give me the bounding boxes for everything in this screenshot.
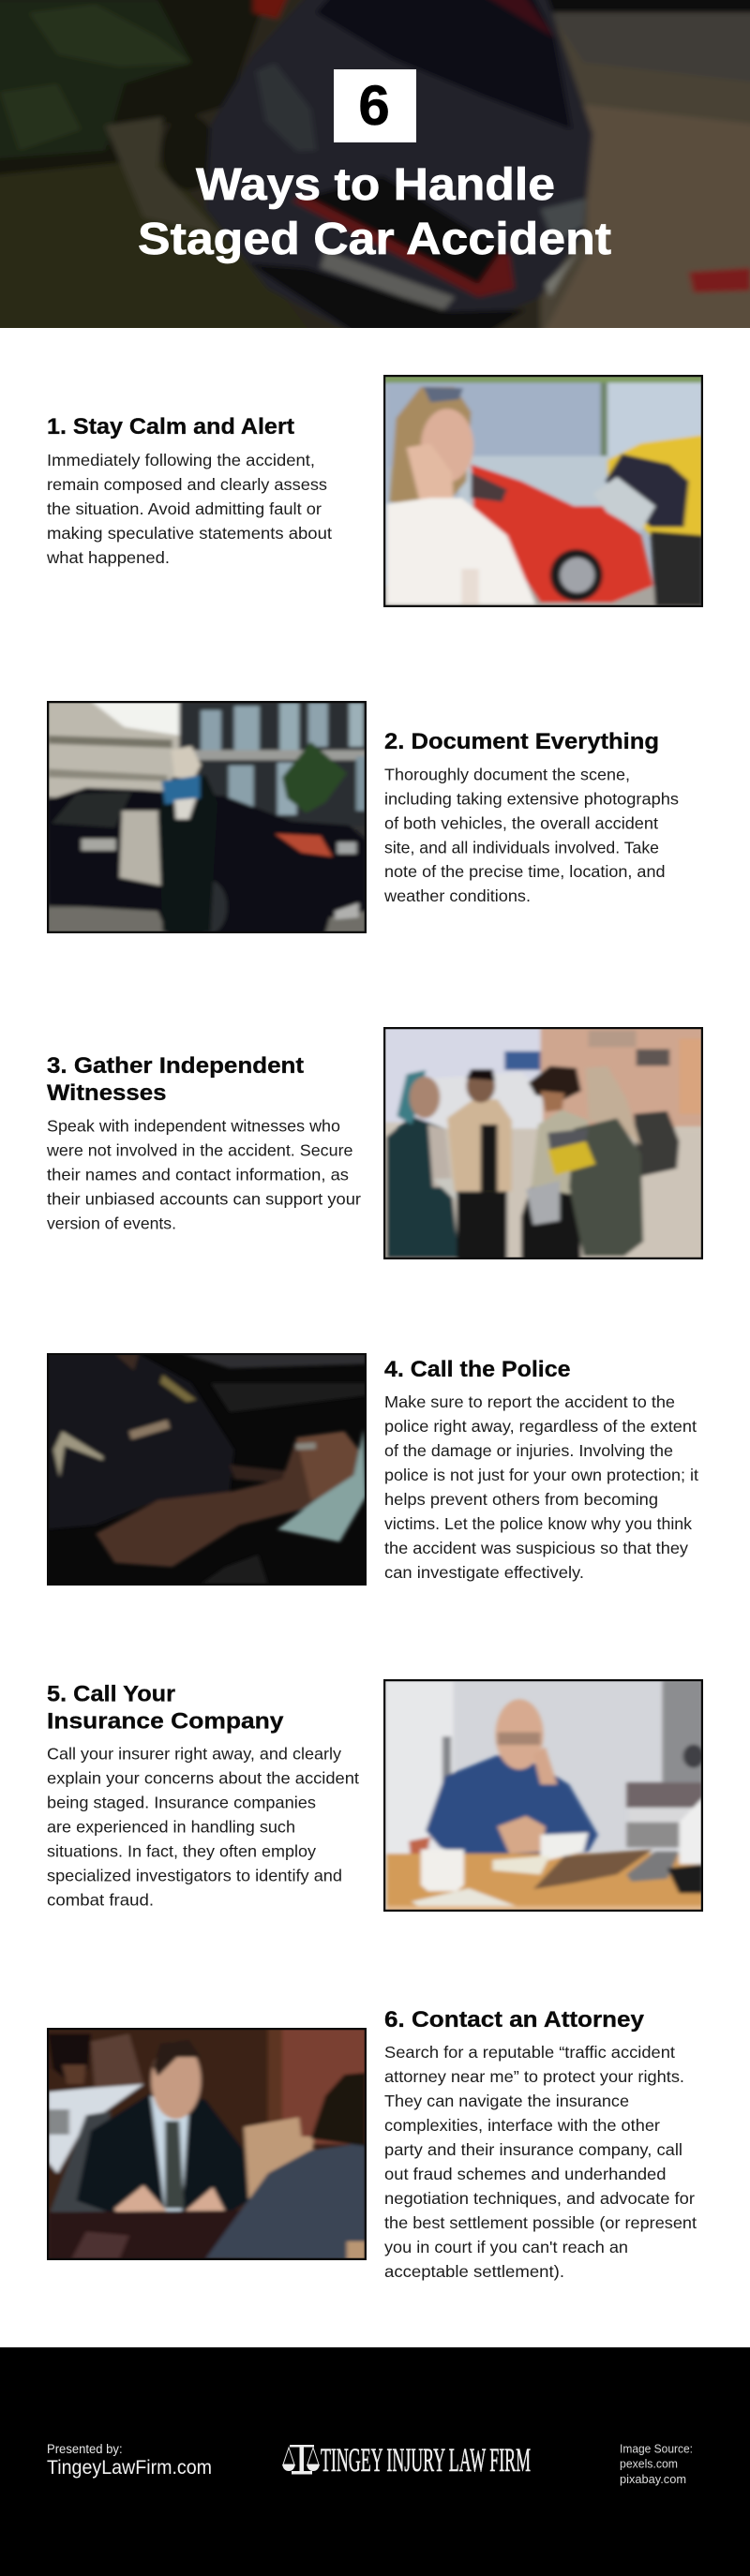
- heading: step 3: [47, 1053, 304, 1106]
- text: step 6: acceptable settlement).: [384, 2262, 564, 2281]
- panel: step 6: [47, 2007, 697, 2281]
- text: step 1: making speculative statements about: [47, 524, 332, 543]
- text: step 5: being staged. Insurance companies: [47, 1794, 316, 1812]
- text: step 4: victims. Let the police know why you think: [384, 1514, 692, 1533]
- text: step 3: were not involved in the accident. Secure: [46, 1141, 352, 1160]
- text: step 4: helps prevent others from becoming: [384, 1490, 658, 1509]
- footer: TINGEY INJURY LAW FIRM: [321, 2441, 531, 2479]
- text: step 6: you in court if you can't reach an: [384, 2238, 628, 2256]
- text: step 1: what happened.: [46, 548, 170, 567]
- text: step 4: police is not just for your own protection; it: [384, 1466, 698, 1484]
- text: step 6: party and their insurance company, call: [384, 2140, 682, 2159]
- number badge: 6: [358, 74, 390, 137]
- text: step 4: police right away, regardless of the extent: [384, 1417, 697, 1436]
- text: step 5: are experienced in handling such: [47, 1818, 295, 1837]
- text: step 6: attorney near me” to protect your rights.: [384, 2067, 684, 2086]
- text: step 4: Make sure to report the accident to the: [384, 1392, 675, 1411]
- heading: step 5: Insurance Company: [47, 1709, 284, 1735]
- title: Staged Car Accident: [138, 215, 611, 264]
- text: step 5: explain your concerns about the accident: [47, 1769, 359, 1788]
- text: step 6: They can navigate the insurance: [384, 2092, 629, 2110]
- text: step 3: their names and contact information, as: [47, 1166, 349, 1184]
- image sources: pexels.com: [620, 2457, 678, 2470]
- heading: step 1: 1. Stay Calm and Alert: [47, 414, 294, 439]
- number badge: [334, 69, 416, 142]
- text: step 6: Search for a reputable “traffic accident: [384, 2043, 675, 2062]
- text: step 5: combat fraud.: [47, 1890, 154, 1909]
- title: [138, 160, 611, 264]
- text: step 3: their unbiased accounts can support your: [47, 1190, 361, 1209]
- text: step 5: [47, 1745, 359, 1909]
- text: step 3: Speak with independent witnesses who: [47, 1117, 340, 1136]
- text: step 1: the situation. Avoid admitting fault or: [47, 499, 322, 518]
- photo: attorney meeting with client: [47, 2028, 368, 2260]
- panel: step 2: [47, 701, 679, 934]
- heading: step 3: 3. Gather Independent: [47, 1053, 304, 1079]
- text: step 2: site, and all individuals involved. Take: [384, 838, 659, 856]
- heading: step 4: 4. Call the Police: [384, 1357, 570, 1382]
- text: step 5: specialized investigators to identify and: [47, 1867, 342, 1885]
- text: step 2: [383, 766, 679, 905]
- text: step 2: weather conditions.: [383, 886, 531, 905]
- footer: [0, 2347, 750, 2576]
- text: step 2: including taking extensive photographs: [384, 789, 679, 808]
- heading: step 5: [47, 1682, 284, 1735]
- image sources: [620, 2441, 693, 2486]
- heading: step 3: Witnesses: [47, 1080, 167, 1106]
- panel: step 3: [46, 1026, 703, 1260]
- text: step 3: [46, 1117, 361, 1232]
- text: step 2: of both vehicles, the overall accident: [384, 813, 658, 832]
- photo: man on phone at desk: [383, 1679, 704, 1913]
- icon: scales of justice: [282, 2445, 320, 2474]
- text: step 6: the best settlement possible (or represent: [384, 2213, 697, 2232]
- presented by: [47, 2442, 212, 2479]
- text: step 1: remain composed and clearly assess: [47, 475, 327, 494]
- presented by: Presented by:: [47, 2442, 123, 2456]
- text: step 2: Thoroughly document the scene,: [384, 766, 630, 784]
- presented by: TingeyLawFirm.com: [47, 2457, 212, 2479]
- title: Ways to Handle: [196, 160, 555, 210]
- text: step 6: negotiation techniques, and advocate for: [384, 2189, 695, 2208]
- photo: group of witnesses on a street: [383, 1026, 703, 1260]
- photo: woman on phone by crashed cars: [383, 375, 703, 609]
- text: step 4: [384, 1392, 698, 1582]
- text: step 1: Immediately following the accident,: [47, 451, 315, 469]
- panel: step 4: [47, 1353, 698, 1586]
- header banner: [0, 0, 750, 339]
- photo: woman with notebook beside black car: [47, 701, 367, 934]
- image sources: pixabay.com: [620, 2472, 686, 2486]
- panel: step 5: [47, 1679, 704, 1913]
- text: step 1: [46, 451, 332, 567]
- text: step 4: of the damage or injuries. Involving the: [384, 1441, 673, 1460]
- text: step 3: version of events.: [47, 1214, 176, 1232]
- text: step 5: Call your insurer right away, and clearly: [47, 1745, 341, 1764]
- text: step 6: [384, 2043, 697, 2281]
- logo: Tingey Injury Law Firm: [282, 2441, 531, 2479]
- text: step 5: situations. In fact, they often employ: [47, 1842, 316, 1861]
- heading: step 2: 2. Document Everything: [384, 729, 659, 754]
- photo: police officer writing a report: [47, 1353, 367, 1586]
- text: step 6: out fraud schemes and underhanded: [384, 2165, 666, 2183]
- text: step 4: the accident was suspicious so that they: [384, 1539, 688, 1557]
- heading: step 5: 5. Call Your: [47, 1682, 175, 1707]
- text: step 2: note of the precise time, location, and: [384, 862, 666, 881]
- image sources: Image Source:: [620, 2441, 693, 2455]
- text: step 4: can investigate effectively.: [384, 1563, 584, 1582]
- heading: step 6: 6. Contact an Attorney: [384, 2007, 645, 2033]
- hero photo: crashed dark car: [0, 0, 750, 339]
- panel: step 1: [46, 375, 703, 609]
- text: step 6: complexities, interface with the other: [384, 2116, 660, 2135]
